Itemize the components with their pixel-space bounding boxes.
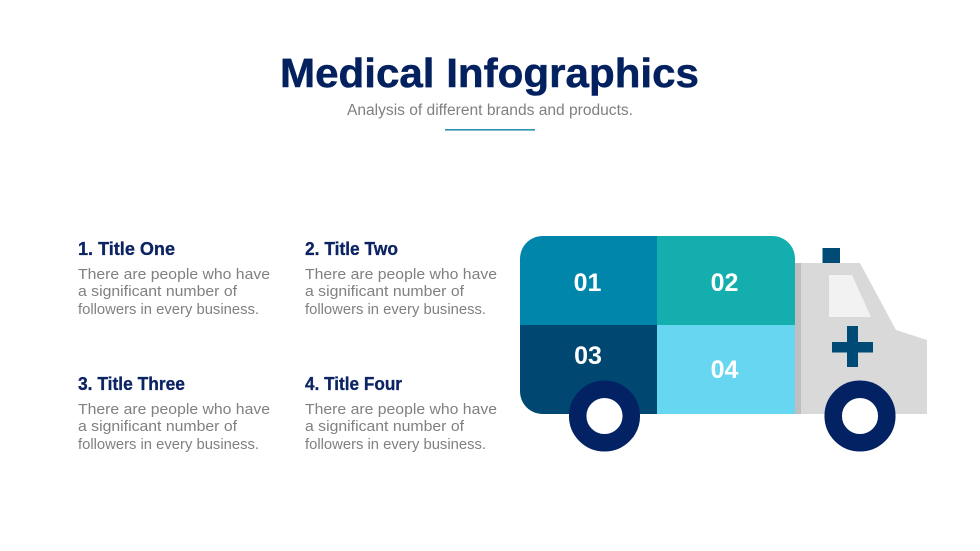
text block: title four: a significant number of [305, 418, 465, 435]
text block: title two: a significant number of [305, 283, 465, 300]
text block: title one: There are people who have [78, 266, 270, 283]
text block: title four: 4. Title Four [305, 373, 402, 394]
segment 03: 03 [574, 342, 602, 370]
text block: title three: 3. Title Three [78, 373, 185, 394]
title underline [445, 129, 535, 131]
segment 04 [657, 325, 795, 414]
medical cross [832, 326, 873, 367]
text block: title two [305, 238, 497, 318]
text block: title three: a significant number of [78, 418, 238, 435]
text block: title two: 2. Title Two [305, 238, 398, 259]
text block: title one: followers in every business. [78, 301, 259, 318]
text block: title three: There are people who have [78, 401, 270, 418]
text block: title one [78, 238, 270, 318]
ambulance cab [795, 248, 927, 414]
roof beacon [822, 248, 840, 263]
subtitle: Analysis of different brands and products. [347, 102, 633, 119]
ambulance illustration [520, 236, 927, 443]
rear wheel [578, 389, 631, 443]
text block: title three [78, 373, 270, 453]
text block: title four: followers in every business. [305, 436, 486, 453]
text block: title two: There are people who have [305, 266, 497, 283]
text block: title two: followers in every business. [305, 301, 486, 318]
segment 02: 02 [711, 269, 738, 297]
front wheel [833, 389, 887, 443]
segment 01 [520, 236, 658, 326]
segment 01: 01 [574, 269, 601, 297]
segment 04: 04 [711, 356, 738, 384]
text block: title three: followers in every business. [78, 436, 259, 453]
text block: title four: There are people who have [305, 401, 497, 418]
segment 02 [657, 236, 795, 326]
title: Medical Infographics [280, 50, 699, 96]
text block: title one: a significant number of [78, 283, 238, 300]
text block: title four [305, 373, 497, 453]
text block: title one: 1. Title One [78, 238, 175, 259]
cab window [829, 275, 871, 317]
segment 03 [520, 325, 658, 414]
